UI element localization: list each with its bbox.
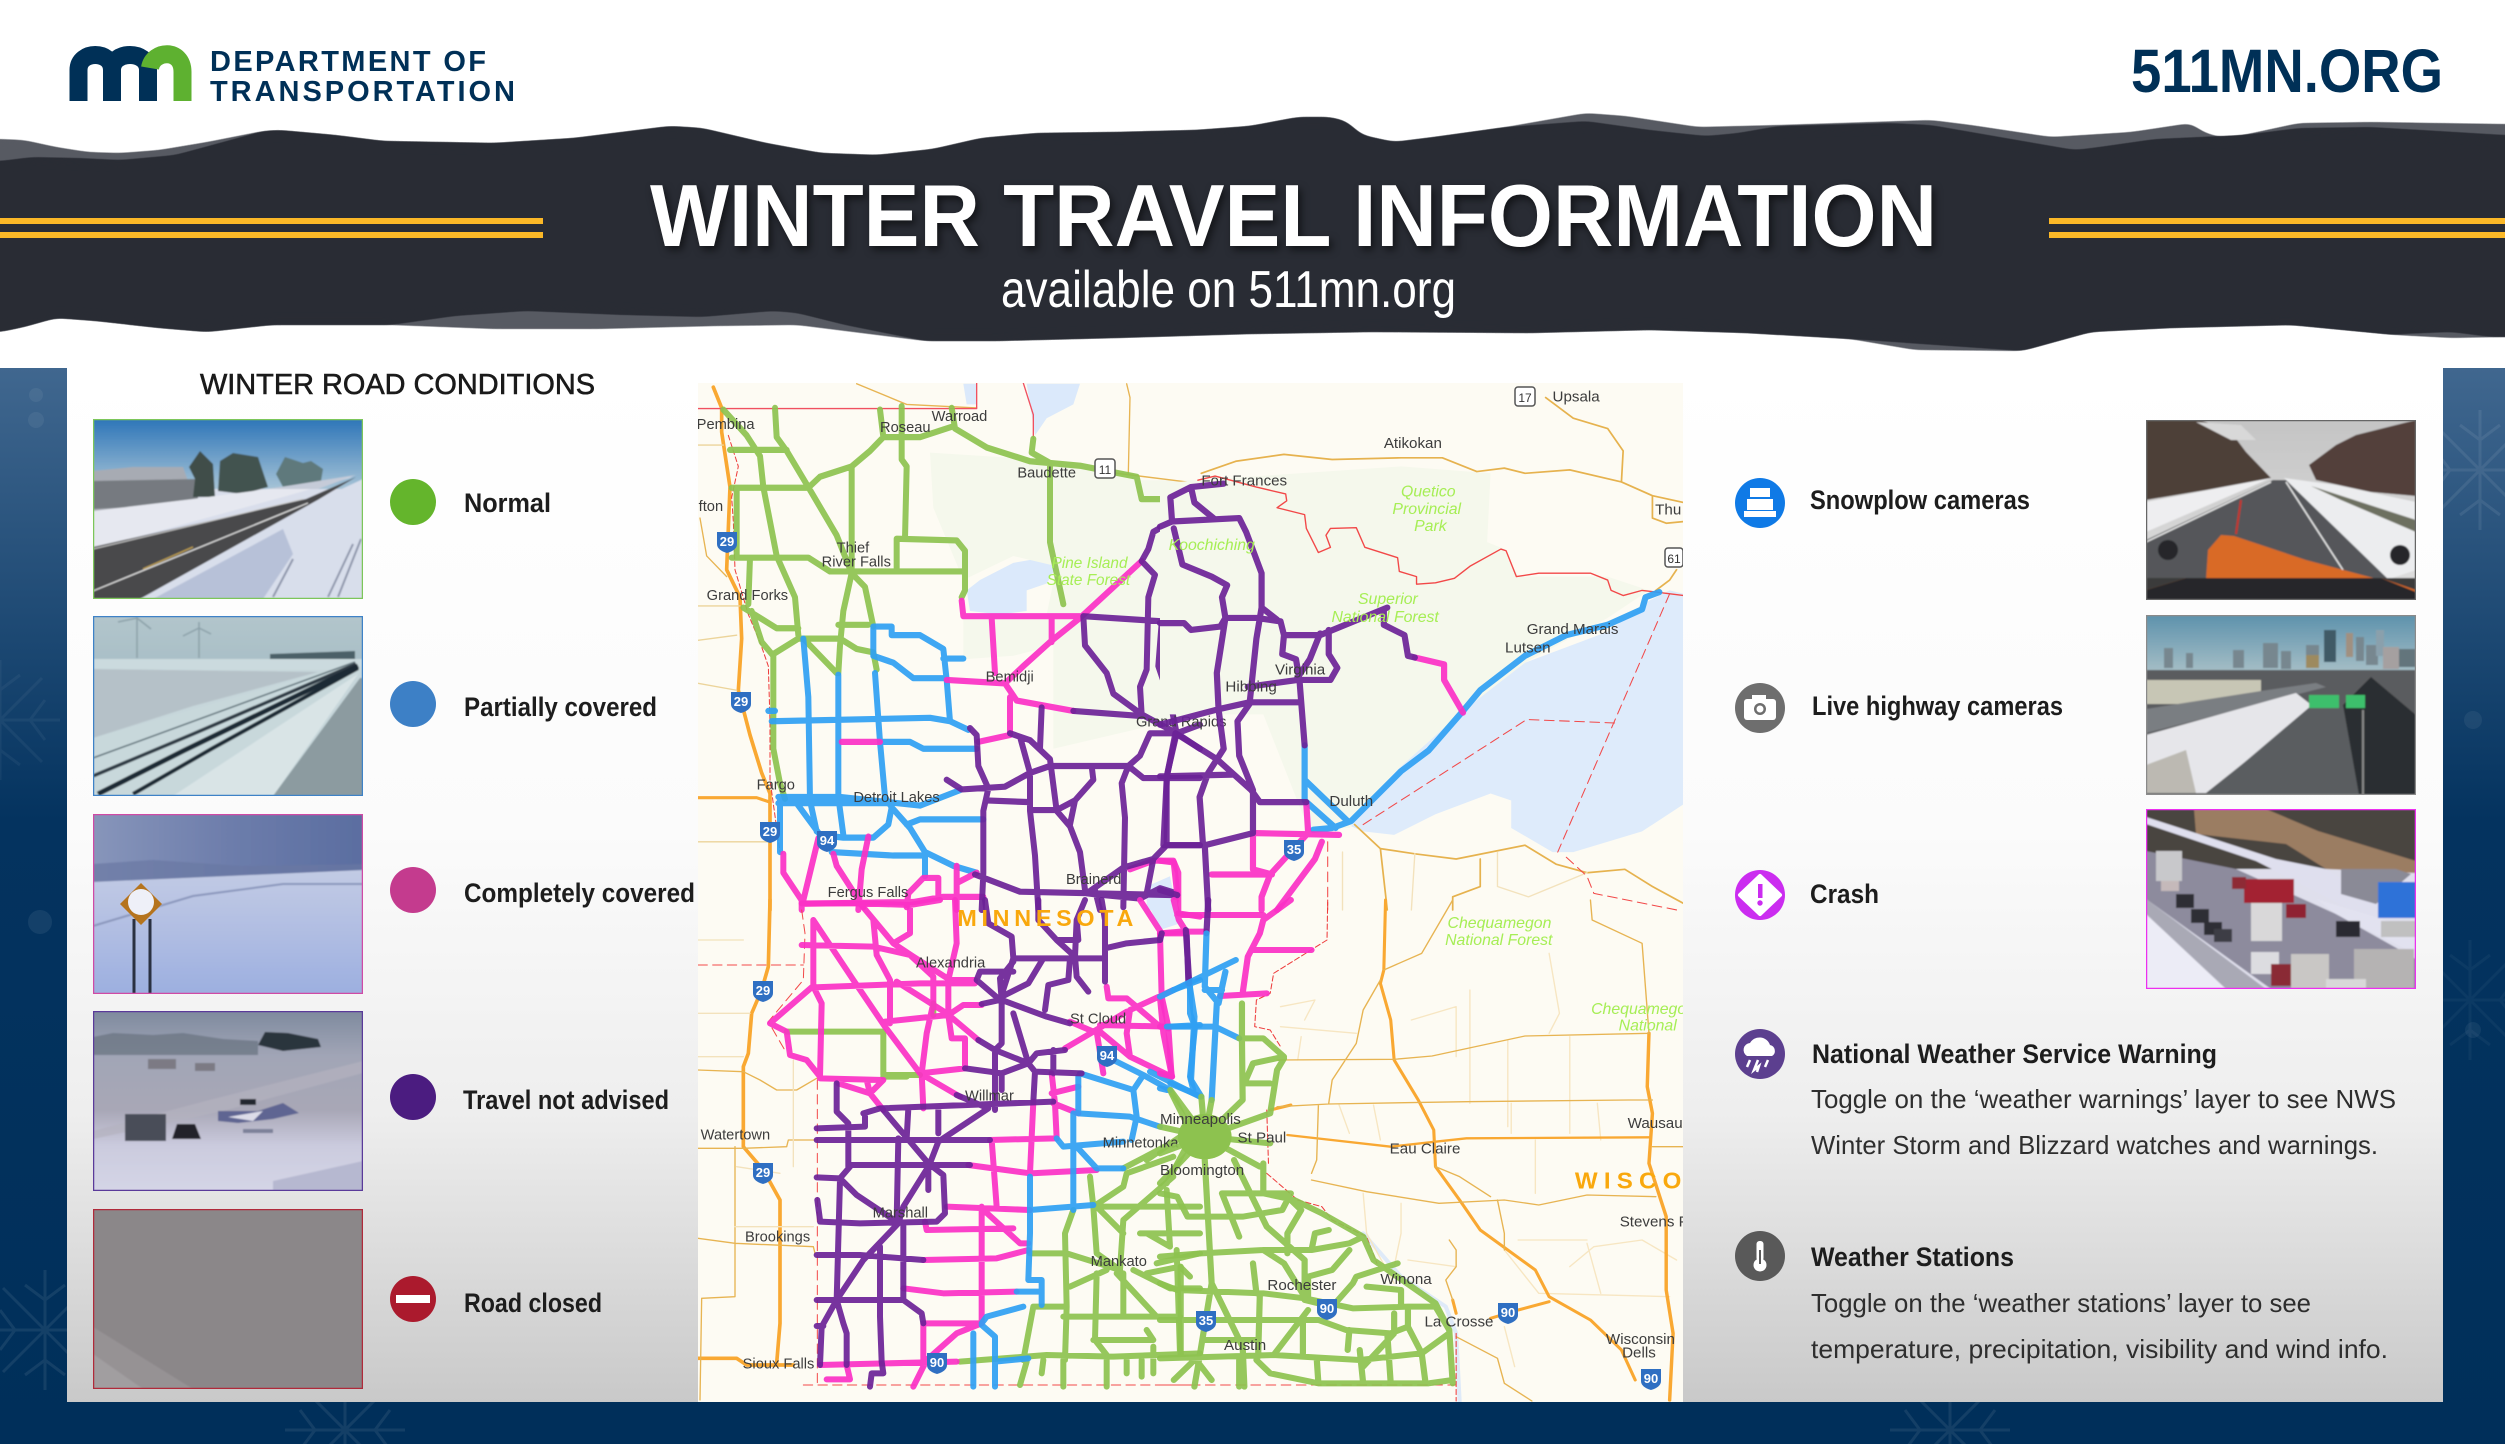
map region: northwest: Grand Rapids xyxy=(1136,714,1226,730)
map region: northeast: Quetico xyxy=(1401,484,1456,501)
map region: southeast: Austin xyxy=(1224,1338,1266,1354)
map region: southeast: Chequamegon xyxy=(1591,1001,1695,1018)
map region: southwest: Alexandria xyxy=(916,955,986,971)
legend icon: road closed xyxy=(390,1276,436,1322)
map region: southeast: Chequamegon xyxy=(1448,915,1551,932)
legend label: completely covered: Completely covered xyxy=(464,878,695,908)
map region: northwest: Fargo xyxy=(757,777,795,793)
legend label: travel not advised: Travel not advised xyxy=(463,1085,669,1115)
map region: southeast: Bloomington xyxy=(1160,1163,1244,1179)
map region: southeast: Winona xyxy=(1380,1272,1432,1288)
label: snowplow cameras: Snowplow cameras xyxy=(1810,485,2030,515)
map xyxy=(697,383,1770,1402)
banner xyxy=(0,113,2505,351)
text block: weather stations: Weather Stations xyxy=(1811,1242,2014,1272)
map region: northwest: State Forest xyxy=(1047,572,1131,589)
map region: northeast: Provincial xyxy=(1392,501,1462,518)
interstate shields: 90 xyxy=(1644,1371,1658,1386)
interstate shields: 35 xyxy=(1287,842,1301,857)
map region: northeast: Lutsen xyxy=(1505,639,1551,656)
map region: northeast: Park xyxy=(1414,518,1448,535)
road stripes right xyxy=(2049,218,2505,238)
photo: road closed xyxy=(93,1209,363,1389)
interstate shields: 35 xyxy=(1199,1313,1213,1328)
text block: weather stations: Toggle on the ‘weather stations’ layer to see xyxy=(1811,1288,2311,1318)
map region: southeast: La Crosse xyxy=(1424,1315,1493,1331)
interstate shields: 94 xyxy=(820,833,835,848)
map region: northeast: Atikokan xyxy=(1384,435,1442,452)
map region: northeast: Hibbing xyxy=(1225,679,1277,696)
white content panel xyxy=(67,368,2443,1402)
icon: crash xyxy=(1735,870,1785,920)
map region: northeast: Superior xyxy=(1358,591,1419,608)
map region: southeast: Wausau xyxy=(1628,1116,1683,1132)
interstate shields: 29 xyxy=(734,694,748,709)
photo: crash scene xyxy=(2146,809,2416,989)
photo: live highway camera xyxy=(2146,615,2416,795)
map region: northeast: Virginia xyxy=(1275,661,1326,678)
map region: northeast: Upsala xyxy=(1553,389,1600,406)
road stripes left xyxy=(0,218,543,238)
map region: southeast xyxy=(1156,897,1683,1402)
map region: southwest: MINNESOTA xyxy=(957,905,1133,931)
legend dot: travel not advised xyxy=(390,1074,436,1120)
map region: southwest: Sioux Falls xyxy=(743,1356,814,1372)
site url top right: 511MN.ORG xyxy=(2131,37,2443,105)
icon: snowplow xyxy=(1735,478,1785,528)
map region: northwest: Pembina xyxy=(697,417,755,433)
map region: southeast: WISCONSIN xyxy=(1575,1169,1770,1194)
subtitle: available on 511mn.org xyxy=(1001,261,1456,319)
map region: southeast: Stevens Point xyxy=(1620,1215,1714,1231)
logo: MnDOT: DEPARTMENT OF xyxy=(210,46,486,78)
photo: partially covered road xyxy=(93,616,363,796)
map region: northwest: Roseau xyxy=(880,420,931,436)
interstate shields: 90 xyxy=(1320,1301,1334,1316)
icon: weather warning xyxy=(1735,1029,1785,1079)
map region: northeast: Fort Frances xyxy=(1201,472,1288,489)
legend label: partially covered: Partially covered xyxy=(464,692,657,722)
map region: northwest: Detroit Lakes xyxy=(853,790,940,806)
map region: northeast: Thu xyxy=(1655,502,1681,519)
text block: national weather service warning: Toggle on the ‘weather warnings’ layer to see NWS xyxy=(1811,1084,2396,1114)
icon: camera xyxy=(1735,683,1785,733)
map region: southeast: Wisconsin xyxy=(1606,1332,1675,1348)
photo: travel not advised xyxy=(93,1011,363,1191)
map region: northwest: River Falls xyxy=(822,554,891,570)
map region: northwest: Warroad xyxy=(932,409,987,425)
map region: southwest: Minnetonka xyxy=(1103,1135,1179,1151)
map region: northwest: fton xyxy=(699,499,723,515)
title: WINTER TRAVEL INFORMATION xyxy=(650,166,1937,265)
map region: southeast: Rochester xyxy=(1267,1278,1337,1294)
text block: national weather service warning: National Weather Service Warning xyxy=(1812,1039,2217,1069)
map region: southwest: Willmar xyxy=(965,1089,1014,1105)
text block: weather stations: temperature, precipitation, visibility and wind info. xyxy=(1811,1334,2388,1364)
label: crash: Crash xyxy=(1810,879,1879,909)
interstate shields: 61 xyxy=(1667,552,1681,566)
photo: completely covered road xyxy=(93,814,363,994)
map region: southwest: Brookings xyxy=(745,1230,810,1246)
map region: northwest: Bemidji xyxy=(986,669,1034,686)
map region: northeast: Koochiching xyxy=(1169,537,1255,554)
interstate shields: 94 xyxy=(1100,1048,1115,1063)
map region: northeast: National Forest xyxy=(1331,609,1439,626)
photo: normal road xyxy=(93,419,363,599)
logo: MnDOT: TRANSPORTATION xyxy=(210,76,515,108)
map region: northwest: Baudette xyxy=(1017,465,1076,482)
map region: northwest: Brainerd xyxy=(1066,872,1121,888)
map region: northeast: Duluth xyxy=(1329,793,1373,810)
interstate shields: 90 xyxy=(1501,1305,1515,1320)
map region: southwest: St Cloud xyxy=(1070,1011,1126,1027)
legend dot: partially covered xyxy=(390,681,436,727)
interstate shields: 90 xyxy=(930,1355,944,1370)
map region: southeast: Minneapolis xyxy=(1160,1112,1241,1128)
map region: northwest: Pine Island xyxy=(1052,555,1129,572)
map region: southeast: St Paul xyxy=(1237,1131,1286,1147)
legend dot: normal xyxy=(390,479,436,525)
map region: northeast xyxy=(1160,389,1684,910)
map region: southwest xyxy=(698,900,1200,1400)
icon: weather station thermometer xyxy=(1735,1231,1785,1281)
interstate shields: 29 xyxy=(763,824,777,839)
interstate shields: 29 xyxy=(756,983,770,998)
map region: northwest: Thief xyxy=(837,540,870,557)
interstate shields: 29 xyxy=(756,1165,770,1180)
logo: MnDOT xyxy=(78,46,515,108)
legend label: normal: Normal xyxy=(464,488,551,518)
map region: northwest: Grand Forks xyxy=(707,588,788,604)
map region: northeast: Grand Marais xyxy=(1527,621,1619,638)
map region: southeast: National Forest xyxy=(1445,932,1553,949)
interstate shields xyxy=(717,387,1683,1390)
legend label: road closed: Road closed xyxy=(464,1288,602,1318)
text block: national weather service warning: Winter Storm and Blizzard watches and warnings. xyxy=(1811,1130,2378,1160)
text block: weather stations xyxy=(1811,1242,2388,1364)
text block: national weather service warning xyxy=(1811,1039,2396,1160)
interstate shields: 29 xyxy=(720,534,734,549)
map region: southeast: Eau Claire xyxy=(1390,1142,1460,1157)
map region: northwest xyxy=(697,383,1226,910)
map region: southeast: Dells xyxy=(1622,1346,1656,1361)
map region: northwest: Fergus Falls xyxy=(828,885,908,901)
map region: southwest: Mankato xyxy=(1091,1254,1147,1270)
legend dot: completely covered xyxy=(390,867,436,913)
heading: winter road conditions: WINTER ROAD CONDITIONS xyxy=(200,369,595,401)
label: live highway cameras: Live highway cameras xyxy=(1812,691,2063,721)
map region: southwest: Watertown xyxy=(701,1127,770,1143)
photo: snowplow camera xyxy=(2146,420,2416,600)
map region: southeast: National xyxy=(1619,1018,1677,1035)
interstate shields: 11 xyxy=(1099,463,1112,477)
interstate shields: 17 xyxy=(1518,391,1532,405)
map region: southwest: Marshall xyxy=(873,1205,928,1221)
